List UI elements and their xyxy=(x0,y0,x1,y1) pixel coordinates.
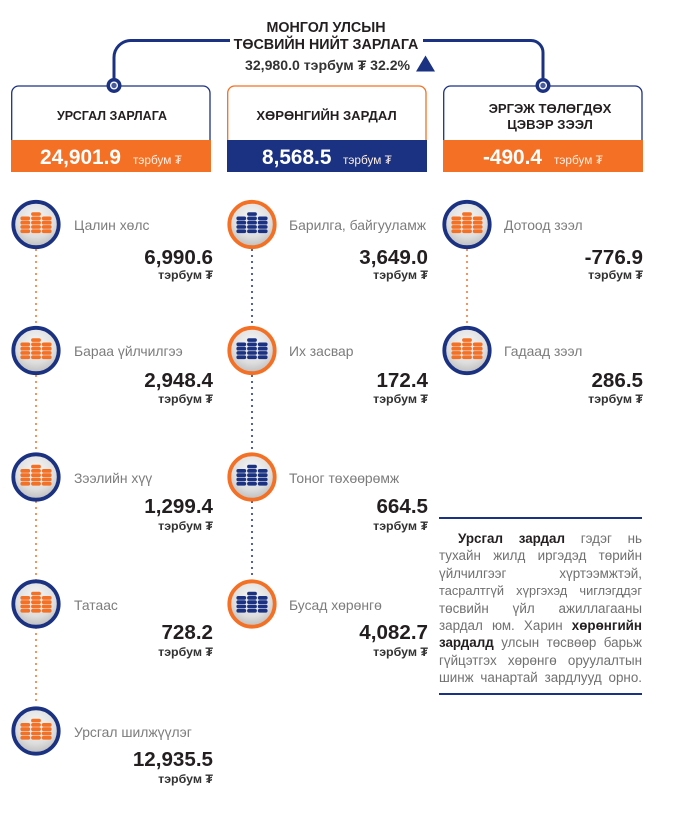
item: goods and services: Бараа үйлчилгээ xyxy=(74,343,183,359)
item: salaries xyxy=(74,217,213,282)
item: current transfers: тэрбум ₮ xyxy=(158,772,213,786)
item: domestic loans: -776.9 xyxy=(585,246,643,268)
node: left xyxy=(106,78,122,93)
item: subsidies: 728.2 xyxy=(161,621,213,644)
card heading: capital expenditure: ХӨРӨНГИЙН ЗАРДАЛ xyxy=(256,108,397,123)
card value: current expenditure xyxy=(11,140,211,172)
item: construction: тэрбум ₮ xyxy=(373,268,428,282)
item: domestic loans: Дотоод зээл xyxy=(504,217,583,233)
item: other assets: тэрбум ₮ xyxy=(373,645,428,659)
item: equipment: Тоног төхөөрөмж xyxy=(289,470,399,486)
item: equipment xyxy=(289,470,428,532)
item: goods and services xyxy=(74,343,213,406)
explanatory note: шинж чанартай зардлууд орно. xyxy=(439,670,642,685)
item: foreign loans: тэрбум ₮ xyxy=(588,392,643,406)
item: construction: 3,649.0 xyxy=(359,246,428,268)
node: right xyxy=(536,78,550,93)
explanatory note: зардалд улсын төсвөөр барьж xyxy=(439,635,642,650)
item: major repairs: Их засвар xyxy=(289,343,354,359)
explanatory note xyxy=(439,531,642,685)
total figure: 32,980.0 тэрбум ₮ 32.2% xyxy=(245,57,410,73)
item: equipment: тэрбум ₮ xyxy=(373,518,428,532)
item: major repairs xyxy=(289,343,428,406)
card value: net lending: тэрбум ₮ xyxy=(554,153,603,167)
item: domestic loans: тэрбум ₮ xyxy=(588,268,643,282)
card outlines xyxy=(12,86,642,141)
item: interest xyxy=(74,470,213,532)
item: subsidies: тэрбум ₮ xyxy=(158,645,213,659)
note rules xyxy=(439,517,642,695)
dotted connectors xyxy=(36,250,467,705)
explanatory note: тухайн жилд иргэдэд төрийн xyxy=(439,548,642,563)
explanatory note: гүйцэтгэх хөрөнгө оруулалтын xyxy=(439,653,642,668)
card value: capital expenditure xyxy=(227,140,427,172)
item: subsidies xyxy=(74,597,213,659)
item: construction: Барилга, байгууламж xyxy=(289,217,426,233)
card value: net lending xyxy=(443,140,643,172)
item: other assets xyxy=(289,597,428,659)
item: salaries: 6,990.6 xyxy=(144,246,213,268)
explanatory note: тасралтгүй хүргэхэд чиглэгддэг xyxy=(439,583,642,598)
item: salaries: тэрбум ₮ xyxy=(158,268,213,282)
title: МОНГОЛ УЛСЫН xyxy=(266,20,386,36)
item: current transfers: Урсгал шилжүүлэг xyxy=(74,724,192,740)
explanatory note: Урсгал зардал гэдэг нь xyxy=(458,531,642,546)
item: foreign loans: Гадаад зээл xyxy=(504,343,582,359)
title: ТӨСВИЙН НИЙТ ЗАРЛАГА xyxy=(234,36,418,52)
item: current transfers: 12,935.5 xyxy=(133,748,213,771)
title xyxy=(234,20,418,52)
column 1 icons xyxy=(13,202,59,754)
item: salaries: Цалин хөлс xyxy=(74,217,149,233)
item: interest: 1,299.4 xyxy=(144,495,213,518)
card value: capital expenditure: 8,568.5 xyxy=(262,146,331,169)
card value: net lending: -490.4 xyxy=(483,146,542,169)
column 3 icons xyxy=(444,202,490,373)
card heading: net lending xyxy=(489,100,612,132)
item: foreign loans xyxy=(504,343,643,406)
card value: current expenditure: тэрбум ₮ xyxy=(133,153,182,167)
item: goods and services: тэрбум ₮ xyxy=(158,392,213,406)
item: domestic loans xyxy=(504,217,643,282)
item: other assets: 4,082.7 xyxy=(359,621,428,644)
item: interest: Зээлийн хүү xyxy=(74,470,152,486)
card heading: net lending: ЦЭВЭР ЗЭЭЛ xyxy=(507,116,593,132)
item: major repairs: 172.4 xyxy=(376,368,428,392)
triangle up xyxy=(416,56,435,72)
card value: current expenditure: 24,901.9 xyxy=(40,146,121,169)
item: subsidies: Татаас xyxy=(74,597,118,613)
item: interest: тэрбум ₮ xyxy=(158,518,213,532)
item: construction xyxy=(289,217,428,282)
explanatory note: төсвийн үйл ажиллагааны xyxy=(439,601,642,616)
item: equipment: 664.5 xyxy=(376,495,428,518)
card heading: net lending: ЭРГЭЖ ТӨЛӨГДӨХ xyxy=(489,100,611,116)
item: foreign loans: 286.5 xyxy=(591,368,643,392)
item: current transfers xyxy=(74,724,213,786)
card value: capital expenditure: тэрбум ₮ xyxy=(343,153,392,167)
card heading: current expenditure: УРСГАЛ ЗАРЛАГА xyxy=(57,109,167,123)
item: goods and services: 2,948.4 xyxy=(144,368,213,392)
column 2 icons xyxy=(229,202,275,627)
item: major repairs: тэрбум ₮ xyxy=(373,392,428,406)
explanatory note: үйлчилгээг хүртээмжтэй, xyxy=(439,566,642,581)
item: other assets: Бусад хөрөнгө xyxy=(289,597,382,613)
explanatory note: зардал юм. Харин хөрөнгийн xyxy=(439,618,642,633)
